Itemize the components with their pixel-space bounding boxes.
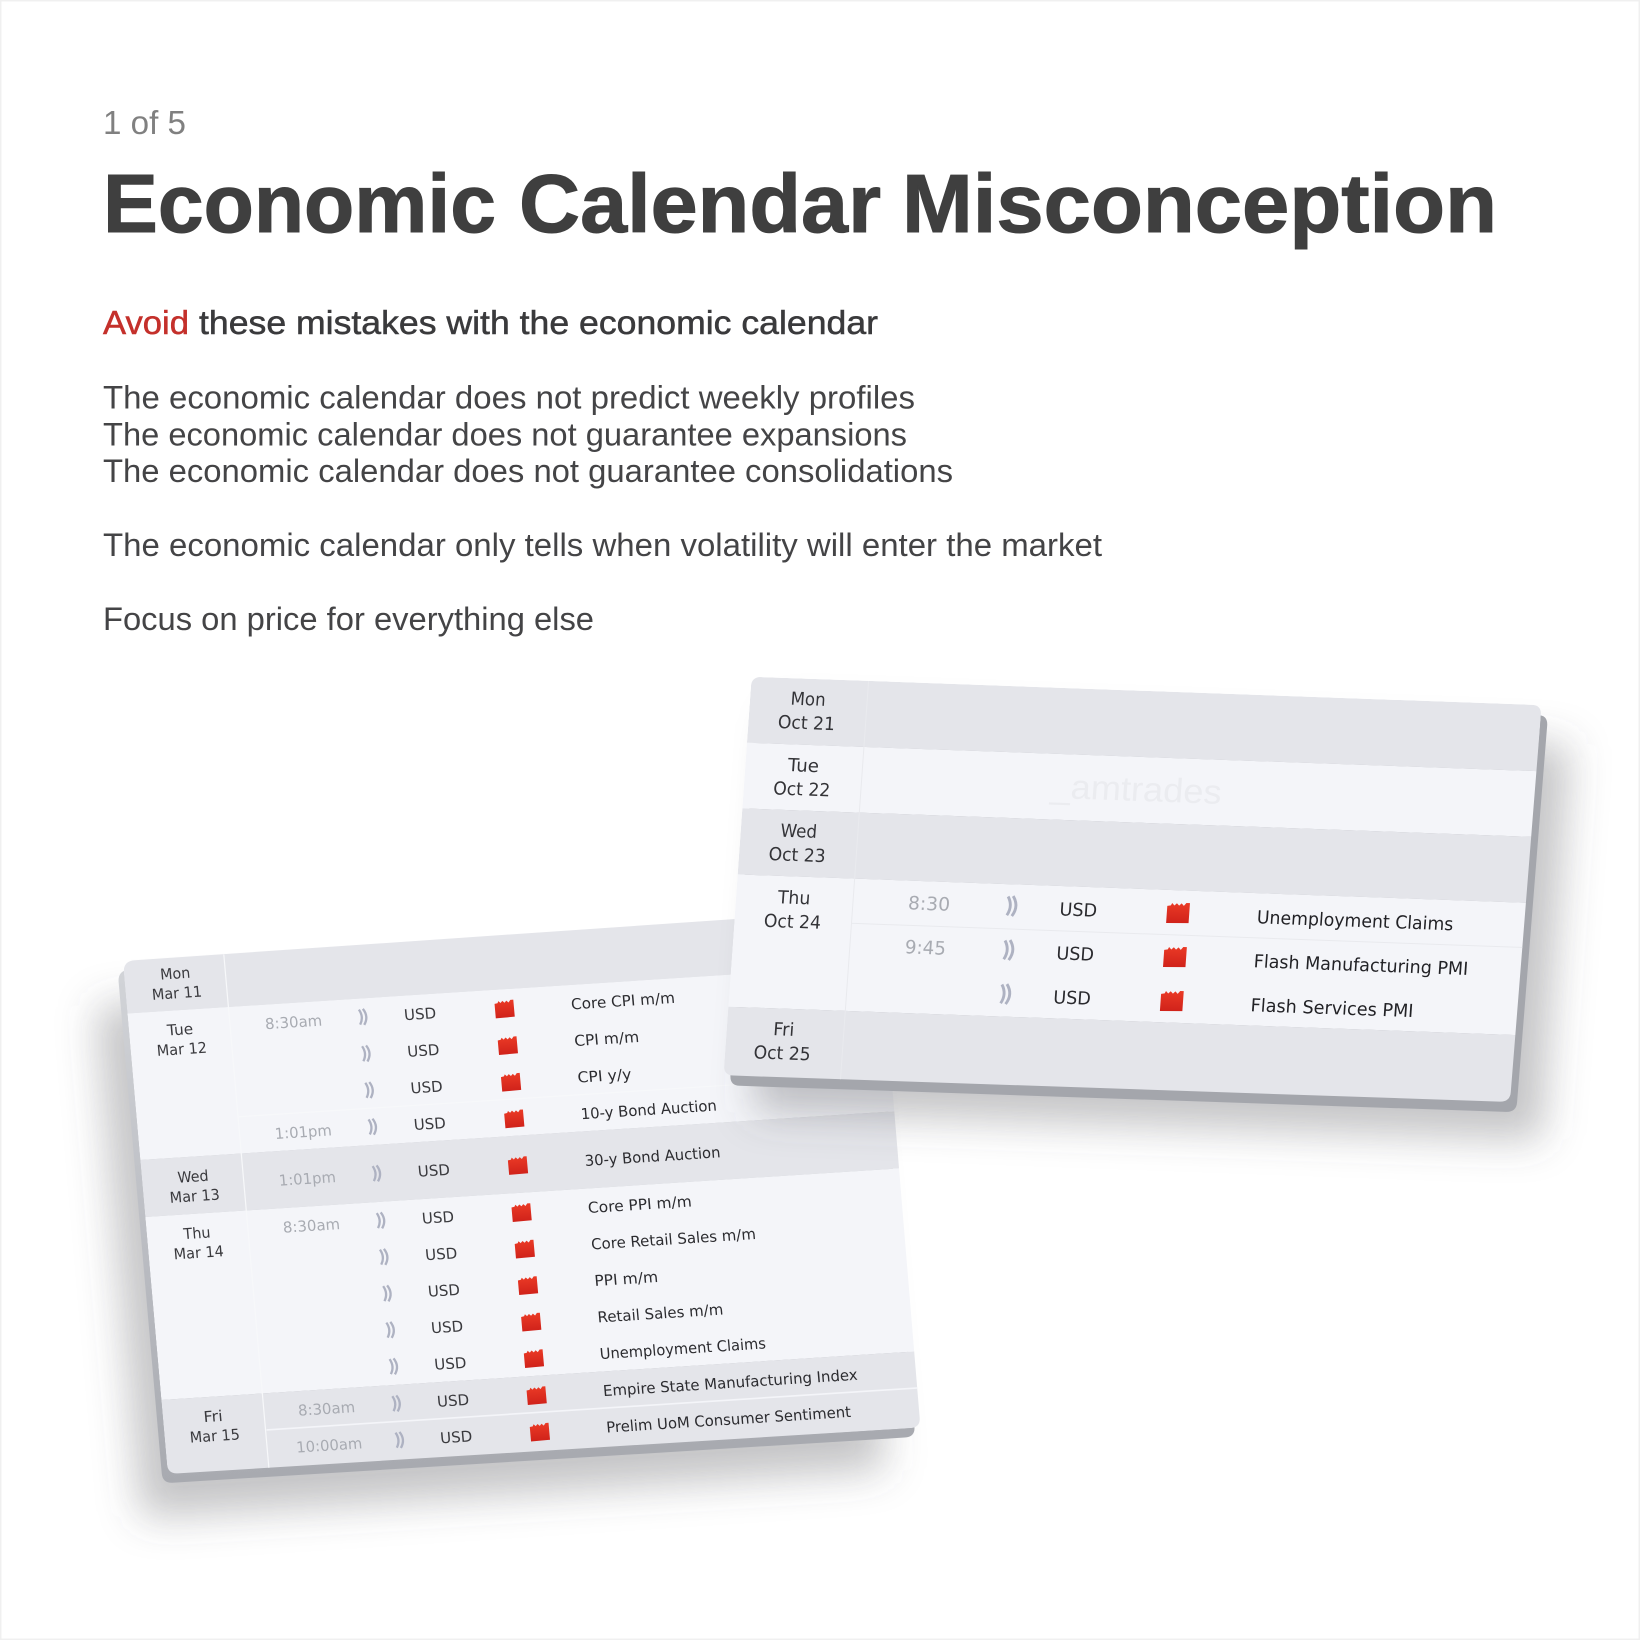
times xyxy=(258,1011,363,1457)
date column: Oct 22 xyxy=(773,778,831,801)
title: Calendar xyxy=(519,157,881,250)
event names: CPI m/m xyxy=(574,1028,640,1050)
event names: PPI m/m xyxy=(594,1268,659,1290)
event names xyxy=(568,979,862,1437)
speaker icons xyxy=(1001,896,1017,1004)
date column: Oct 25 xyxy=(753,1042,811,1065)
date column: Mar 15 xyxy=(189,1426,241,1447)
date column: Fri xyxy=(203,1407,223,1426)
title: Economic xyxy=(103,157,496,250)
date column: Fri xyxy=(773,1019,795,1041)
date column: Mar 12 xyxy=(156,1039,208,1060)
currency labels: USD xyxy=(1059,899,1098,922)
date column: Tue xyxy=(165,1020,194,1040)
currency labels: USD xyxy=(430,1317,464,1337)
date column: Wed xyxy=(177,1167,209,1187)
event names: Core PPI m/m xyxy=(587,1192,692,1217)
body text: what the calendar does not do xyxy=(103,380,953,489)
date column: Mar 11 xyxy=(151,983,203,1004)
subheading: these mistakes with the economic calendar xyxy=(199,304,878,341)
currency labels xyxy=(1053,899,1098,1010)
date column: Thu xyxy=(182,1223,211,1243)
panel: March calendar xyxy=(96,907,929,1518)
subheading: Avoid xyxy=(103,304,189,341)
date column xyxy=(753,688,837,1065)
currency labels: USD xyxy=(427,1281,461,1301)
currency labels: USD xyxy=(410,1077,443,1097)
watermark: _amtrades xyxy=(1048,768,1223,812)
currency labels xyxy=(402,1004,474,1447)
title xyxy=(103,157,1497,250)
shadow: March calendar xyxy=(96,958,886,1518)
times: 8:30am xyxy=(297,1398,356,1420)
red impact icons xyxy=(1160,902,1190,1012)
speaker icons xyxy=(358,1009,404,1448)
event names: Core CPI m/m xyxy=(570,989,676,1013)
date column: Oct 21 xyxy=(777,712,836,735)
body text: what the calendar does not do: The economic calendar does not guarantee consolidations xyxy=(103,453,953,489)
body text: focus on price: Focus on price for everything else xyxy=(103,601,594,637)
event names: Empire State Manufacturing Index xyxy=(602,1366,858,1400)
times: 1:01pm xyxy=(274,1121,333,1143)
currency labels: USD xyxy=(413,1114,447,1134)
date column xyxy=(148,963,242,1447)
body text: what the calendar does not do: The economic calendar does not predict weekly profiles xyxy=(103,380,915,416)
event names: Flash Services PMI xyxy=(1250,995,1414,1022)
panel: October calendar xyxy=(723,677,1570,1140)
page counter: 1 of 5 xyxy=(103,104,186,141)
event names: Core Retail Sales m/m xyxy=(590,1225,757,1254)
event names: Flash Manufacturing PMI xyxy=(1253,951,1469,980)
shadow: October calendar xyxy=(752,716,1570,1140)
October calendar card xyxy=(723,677,1549,1114)
times xyxy=(904,893,951,960)
currency labels: USD xyxy=(403,1004,437,1024)
date column: Wed xyxy=(780,821,818,843)
times: 8:30am xyxy=(282,1215,341,1237)
currency labels: USD xyxy=(421,1208,455,1228)
date column: Mar 14 xyxy=(173,1242,224,1263)
date column: Mon xyxy=(790,689,826,711)
currency labels: USD xyxy=(434,1354,467,1374)
event names: Unemployment Claims xyxy=(599,1334,767,1363)
times: 9:45 xyxy=(904,937,947,960)
red impact icons xyxy=(492,1000,552,1442)
body text: what the calendar does: The economic calendar only tells when volatility will enter the market xyxy=(103,527,1102,563)
date column: Tue xyxy=(786,755,820,777)
event names: Unemployment Claims xyxy=(1256,907,1454,935)
event names: Prelim UoM Consumer Sentiment xyxy=(605,1403,852,1437)
event names: Retail Sales m/m xyxy=(597,1300,724,1327)
date column: Thu xyxy=(776,887,811,909)
times: 8:30am xyxy=(264,1012,323,1033)
date column: Oct 23 xyxy=(768,844,826,867)
currency labels: USD xyxy=(407,1041,440,1061)
event names xyxy=(1250,907,1472,1024)
currency labels: USD xyxy=(1056,943,1095,966)
currency labels: USD xyxy=(439,1427,473,1447)
date column: Oct 24 xyxy=(763,911,822,934)
currency labels: USD xyxy=(424,1244,458,1264)
event names: 10-y Bond Auction xyxy=(580,1097,718,1123)
currency labels: USD xyxy=(417,1161,451,1181)
event names: 30-y Bond Auction xyxy=(584,1143,721,1170)
date column: Mar 13 xyxy=(169,1186,221,1207)
event names: CPI y/y xyxy=(577,1065,632,1087)
title: Misconception xyxy=(902,157,1497,250)
date column: Mon xyxy=(159,964,191,984)
times: 10:00am xyxy=(295,1434,363,1457)
body text: what the calendar does not do: The economic calendar does not guarantee expansions xyxy=(103,416,907,452)
times: 8:30 xyxy=(907,893,951,916)
March calendar card xyxy=(116,907,929,1485)
currency labels: USD xyxy=(1053,987,1092,1010)
times: 1:01pm xyxy=(278,1168,337,1190)
currency labels: USD xyxy=(436,1391,470,1411)
